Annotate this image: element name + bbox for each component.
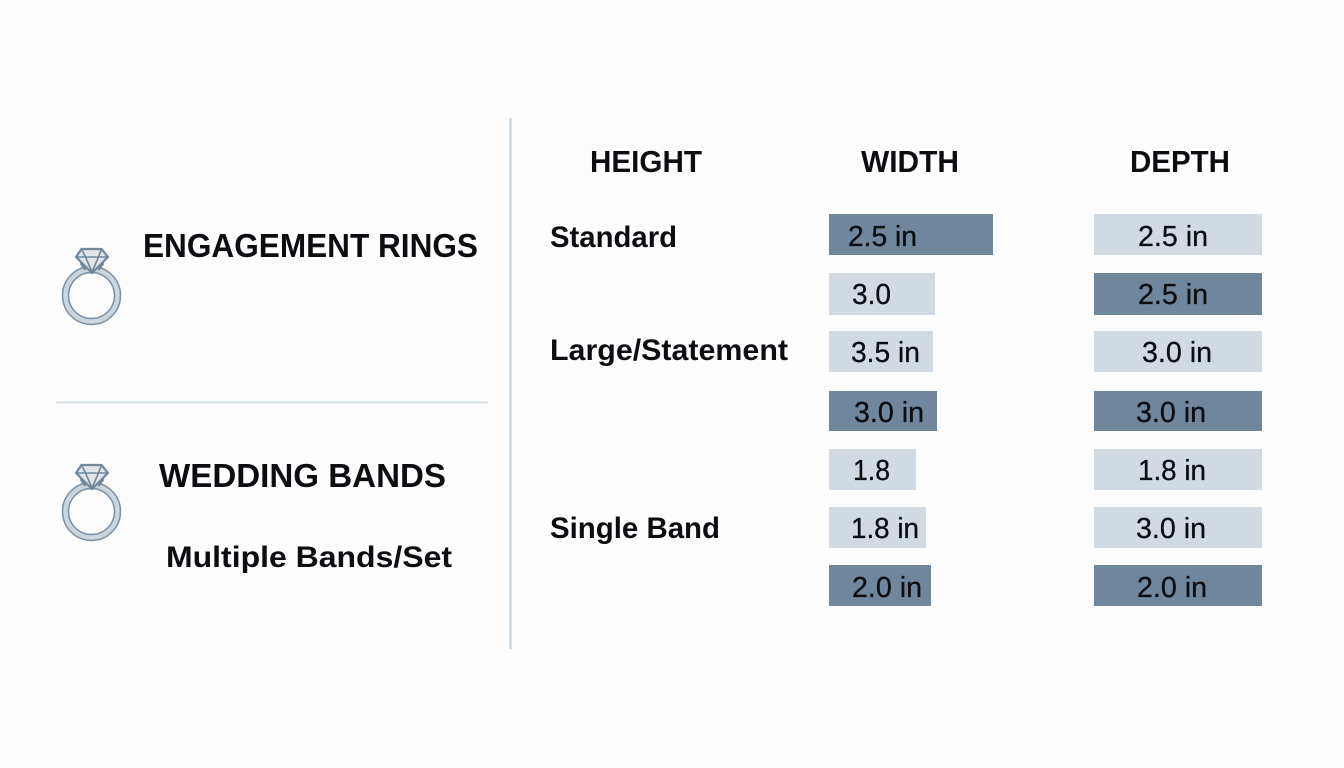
bar: depth 2.5 in — [1094, 273, 1262, 315]
bar: width 2.5 in: 2.5 in — [848, 221, 917, 253]
bar: width 3.5 in — [829, 331, 933, 372]
bar: width 1.8: 1.8 — [853, 455, 890, 487]
heading: depth: DEPTH — [1130, 144, 1230, 179]
bar: depth 2.5 in: 2.5 in — [1138, 279, 1208, 311]
bar: depth 2.5 in: 2.5 in — [1138, 221, 1208, 253]
bar: width 3.0: 3.0 — [852, 279, 891, 311]
heading: height: HEIGHT — [590, 144, 702, 179]
icon: engagement ring — [66, 249, 118, 322]
label: multiple bands/set: Multiple Bands/Set — [166, 541, 452, 574]
heading: width: WIDTH — [861, 144, 959, 179]
column headings — [590, 144, 1230, 179]
label: standard: Standard — [550, 221, 677, 254]
label: large/statement: Large/Statement — [550, 334, 788, 367]
bar: depth 2.5 in — [1094, 214, 1262, 255]
bar: depth 3.0 in: 3.0 in — [1136, 513, 1206, 545]
bar: depth 1.8 in: 1.8 in — [1138, 455, 1206, 487]
bar: width 2.5 in — [829, 214, 993, 255]
bar: depth 3.0 in — [1094, 507, 1262, 548]
width column bars — [829, 214, 993, 606]
bar: width 3.5 in: 3.5 in — [851, 337, 920, 369]
heading: engagement rings: ENGAGEMENT RINGS — [143, 227, 478, 264]
bar: width 3.0 in: 3.0 in — [854, 397, 924, 429]
bar: depth 1.8 in — [1094, 449, 1262, 490]
panel: ring categories — [56, 227, 488, 574]
label: single band: Single Band — [550, 512, 720, 545]
depth column bars — [1094, 214, 1262, 606]
bar: depth 2.0 in — [1094, 565, 1262, 606]
row labels — [550, 221, 788, 545]
bar: depth 3.0 in — [1094, 391, 1262, 431]
bar: depth 3.0 in: 3.0 in — [1136, 397, 1206, 429]
bar: depth 3.0 in — [1094, 331, 1262, 372]
bar: width 1.8 in — [829, 507, 926, 548]
heading: wedding bands: WEDDING BANDS — [159, 457, 446, 494]
bar: width 1.8 in: 1.8 in — [851, 513, 919, 545]
bar: width 1.8 — [829, 449, 916, 490]
bar: width 3.0 in — [829, 391, 937, 431]
bar: width 3.0 — [829, 273, 935, 315]
icon: wedding band ring — [66, 465, 118, 538]
bar: width 2.0 in — [829, 565, 931, 606]
bar: depth 2.0 in: 2.0 in — [1137, 572, 1207, 604]
bar: depth 3.0 in: 3.0 in — [1142, 337, 1212, 369]
bar: width 2.0 in: 2.0 in — [852, 572, 922, 604]
